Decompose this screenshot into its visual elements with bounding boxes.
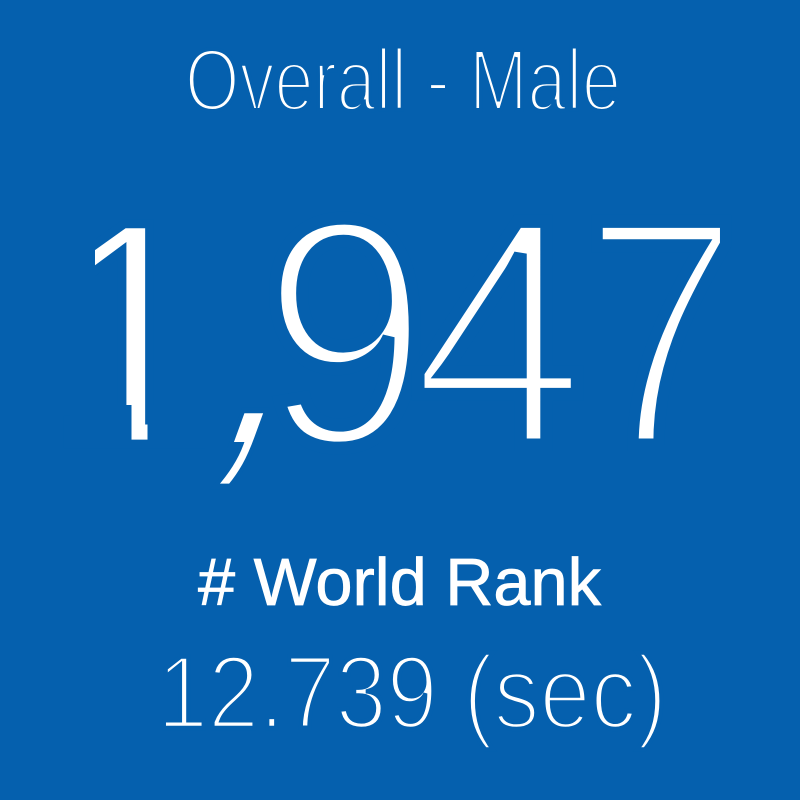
big number: 1,947: , (183, 152, 382, 515)
big number: 1,947 (44, 151, 740, 515)
big number: 1,947: 9 (261, 151, 429, 514)
value: 12.739 (sec): 12.739 (sec) (157, 635, 667, 751)
big number: 1,947: 1 (44, 154, 216, 512)
big number: 1,947: 4 (411, 151, 586, 514)
label: # World Rank: # World Rank (198, 545, 601, 620)
big number: 1,947: 7 (583, 151, 740, 514)
title: Overall - Male: Overall - Male (185, 32, 621, 129)
